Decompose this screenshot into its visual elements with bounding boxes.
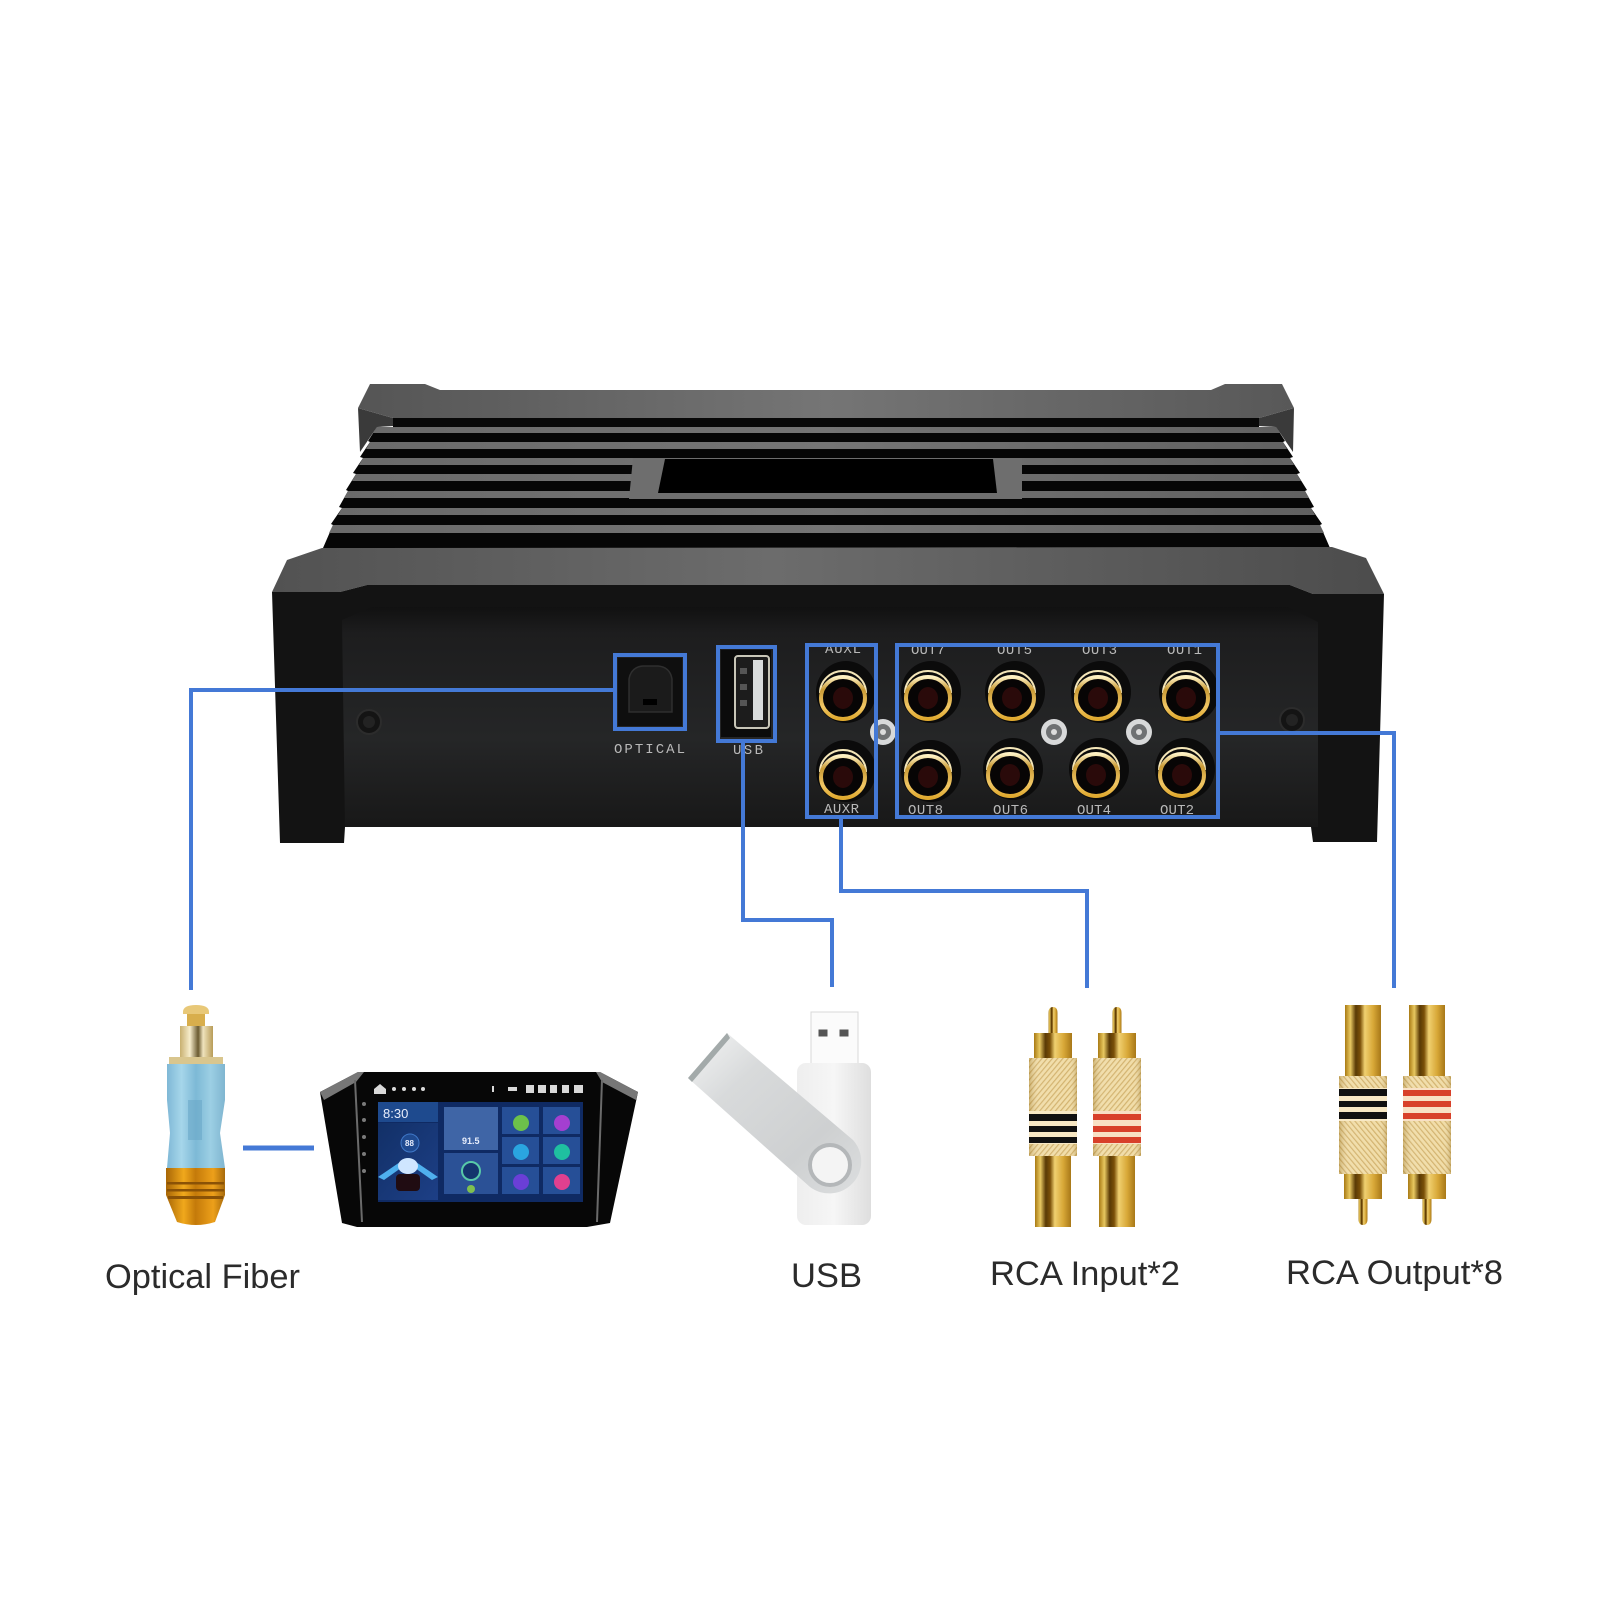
panel port labels: OUT6 <box>993 803 1028 819</box>
panel port labels: OUT1 <box>1167 643 1202 659</box>
RCA jacks <box>816 661 1219 802</box>
panel port labels: OUT7 <box>911 643 945 659</box>
USB port <box>721 650 771 737</box>
front panel <box>342 607 1318 827</box>
head unit side buttons <box>362 1102 366 1173</box>
silver panel screws <box>870 719 1152 745</box>
arrow: RCA output line <box>1218 733 1394 988</box>
icon: RCA input plugs <box>1029 1007 1141 1227</box>
arrow: head unit link <box>243 1146 314 1150</box>
head unit screen: 8:30 <box>383 1106 408 1121</box>
optical port <box>618 658 682 726</box>
highlight: AUX inputs <box>807 645 876 817</box>
panel port labels <box>614 642 1202 819</box>
head unit screen <box>378 1102 583 1202</box>
head unit screen: 88 <box>405 1139 414 1148</box>
heatsink fins <box>323 427 1330 548</box>
arrow: optical line <box>191 690 615 990</box>
blue highlight boxes and connector lines <box>191 645 1394 1148</box>
label: USB: USB <box>791 1257 862 1295</box>
device: DSP amplifier unit <box>272 384 1384 843</box>
icon: USB flash drive <box>688 1012 871 1225</box>
icon: RCA output plugs <box>1339 1005 1451 1225</box>
label: RCA Output*8: RCA Output*8 <box>1286 1254 1503 1292</box>
panel port labels: OUT2 <box>1160 803 1194 819</box>
icon: car head unit <box>320 1072 638 1227</box>
label: Optical Fiber: Optical Fiber <box>105 1258 300 1296</box>
front body <box>272 585 1384 843</box>
arrow: USB line <box>743 741 832 987</box>
panel port labels: OPTICAL <box>614 742 685 758</box>
icon: optical fiber plug <box>166 1005 225 1225</box>
top front surface <box>272 547 1384 594</box>
panel port labels: AUXR <box>824 802 860 818</box>
panel port labels: USB <box>733 743 763 759</box>
head unit status bar <box>374 1084 583 1094</box>
panel port labels: OUT4 <box>1077 803 1111 819</box>
highlight: optical port <box>615 655 685 729</box>
panel port labels: AUXL <box>825 642 861 658</box>
head unit screen: 91.5 <box>462 1136 480 1146</box>
panel port labels: OUT3 <box>1082 643 1117 659</box>
heatsink window <box>658 459 997 493</box>
side mounting screws <box>357 708 1304 734</box>
highlight: USB port <box>718 647 775 741</box>
highlight: RCA outputs <box>897 645 1218 817</box>
panel port labels: OUT5 <box>997 643 1032 659</box>
label: RCA Input*2: RCA Input*2 <box>990 1255 1180 1293</box>
panel port labels: OUT8 <box>908 803 943 819</box>
back edge of heatsink <box>358 384 1294 452</box>
arrow: RCA input line <box>841 817 1087 988</box>
